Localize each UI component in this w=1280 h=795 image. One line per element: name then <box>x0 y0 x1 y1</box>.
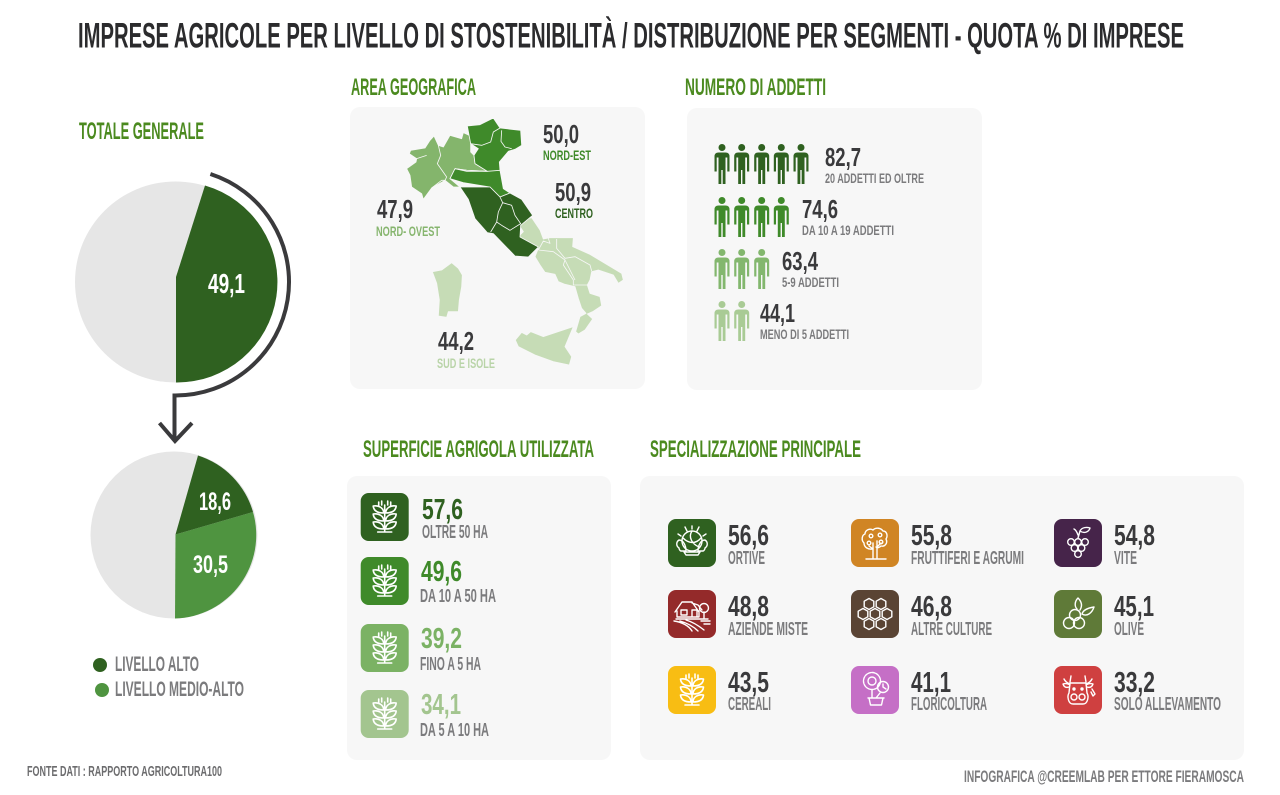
row: meno di 5 addetti: MENO DI 5 ADDETTI <box>760 327 849 342</box>
heading: specializzazione principale: SPECIALIZZAZIONE PRINCIPALE <box>650 436 861 463</box>
item: vite <box>1054 519 1155 568</box>
row: da 10 a 19 addetti: DA 10 A 19 ADDETTI <box>802 223 894 238</box>
row: da 10 a 50 ha: 49,6 <box>421 556 462 588</box>
row: meno di 5 addetti: 44,1 <box>760 300 795 328</box>
row: fino a 5 ha: 39,2 <box>421 623 462 655</box>
item: cereali <box>668 666 771 714</box>
row: oltre 50 ha: 57,6 <box>422 494 463 526</box>
row: da 10 a 50 ha <box>361 556 496 606</box>
panel: specializzazione principale <box>640 476 1244 760</box>
item: altre culture: ALTRE CULTURE <box>911 618 992 639</box>
row: da 5 a 10 ha: DA 5 A 10 HA <box>420 719 489 740</box>
value: centro: CENTRO <box>555 206 593 221</box>
row: meno di 5 addetti <box>714 300 849 342</box>
pie chart: totale generale <box>75 182 277 383</box>
heading: area geografica: AREA GEOGRAFICA <box>351 74 476 101</box>
row: 20 addetti ed oltre: 82,7 <box>825 144 861 172</box>
panel: superficie agricola utilizzata <box>347 476 611 760</box>
map of Italy <box>407 118 623 365</box>
pie chart: breakdown <box>90 452 258 618</box>
pie chart: totale generale: 49,1 <box>208 268 245 299</box>
value: centro: 50,9 <box>555 179 591 207</box>
row: 20 addetti ed oltre <box>714 144 924 186</box>
row: oltre 50 ha: OLTRE 50 HA <box>422 521 488 542</box>
row: fino a 5 ha <box>361 623 481 674</box>
legend <box>93 653 244 701</box>
value: nord-ovest <box>376 196 440 239</box>
legend: LIVELLO MEDIO-ALTO <box>115 678 244 701</box>
item: ortive: ORTIVE <box>728 547 765 568</box>
item: vite: 54,8 <box>1114 520 1155 552</box>
value: nord-est: 50,0 <box>543 121 579 149</box>
panel: area geografica <box>350 107 645 389</box>
item: aziende miste: 48,8 <box>728 591 769 623</box>
item: frutti ferie agrumi <box>851 519 1024 568</box>
item: frutti ferie agrumi: FRUTTIFERI E AGRUMI <box>911 547 1024 568</box>
row: 20 addetti ed oltre: 20 ADDETTI ED OLTRE <box>825 171 924 186</box>
value: nord-ovest: NORD- OVEST <box>376 224 440 239</box>
value: nord-est: NORD-EST <box>543 148 591 163</box>
panel: numero di addetti <box>687 108 982 390</box>
row: da 10 a 19 addetti: 74,6 <box>802 196 838 224</box>
item: solo allevamento: 33,2 <box>1114 667 1155 699</box>
item: floricoltura: FLORICOLTURA <box>911 693 987 714</box>
item: altre culture <box>851 590 992 639</box>
heading: numero di addetti: NUMERO DI ADDETTI <box>685 74 826 101</box>
item: cereali: CEREALI <box>728 693 771 714</box>
item: floricoltura <box>851 666 987 714</box>
row: da 5 a 10 ha: 34,1 <box>421 689 461 721</box>
item: aziende miste: AZIENDE MISTE <box>728 618 808 639</box>
value: sud e isole <box>437 328 495 371</box>
heading: superficie agricola utilizzata: SUPERFICIE AGRIGOLA UTILIZZATA <box>363 436 594 463</box>
item: floricoltura: 41,1 <box>911 667 951 699</box>
row: fino a 5 ha: FINO A 5 HA <box>420 653 481 674</box>
row: da 5 a 10 ha <box>361 689 489 740</box>
item: ortive <box>668 519 769 568</box>
source note: FONTE DATI : RAPPORTO AGRICOLTURA100 <box>27 764 222 780</box>
row: da 10 a 50 ha: DA 10 A 50 HA <box>420 585 496 606</box>
pie chart: breakdown: 30,5 <box>193 551 228 579</box>
value: nord-ovest: 47,9 <box>377 196 413 224</box>
item: olive <box>1054 590 1154 639</box>
row: 5-9 addetti <box>714 248 839 290</box>
item: vite: VITE <box>1114 547 1137 568</box>
heading: totale generale: TOTALE GENERALE <box>79 118 204 145</box>
legend: LIVELLO ALTO <box>115 653 199 676</box>
row: oltre 50 ha <box>361 493 488 542</box>
value: centro <box>555 179 593 221</box>
item: cereali: 43,5 <box>728 667 769 699</box>
item: ortive: 56,6 <box>728 520 769 552</box>
item: altre culture: 46,8 <box>911 591 952 623</box>
value: sud e isole: SUD E ISOLE <box>437 356 495 371</box>
row: da 10 a 19 addetti <box>714 196 894 238</box>
arrow: from total to breakdown <box>160 174 289 441</box>
item: aziende miste <box>668 590 808 639</box>
item: solo allevamento <box>1054 666 1221 714</box>
item: frutti ferie agrumi: 55,8 <box>911 520 952 552</box>
item: olive: 45,1 <box>1114 591 1154 623</box>
pie chart: breakdown: 18,6 <box>199 488 231 516</box>
value: nord-est <box>543 121 591 163</box>
row: 5-9 addetti: 63,4 <box>782 248 819 276</box>
item: olive: OLIVE <box>1114 618 1144 639</box>
row: 5-9 addetti: 5-9 ADDETTI <box>782 275 839 290</box>
value: sud e isole: 44,2 <box>438 328 474 356</box>
